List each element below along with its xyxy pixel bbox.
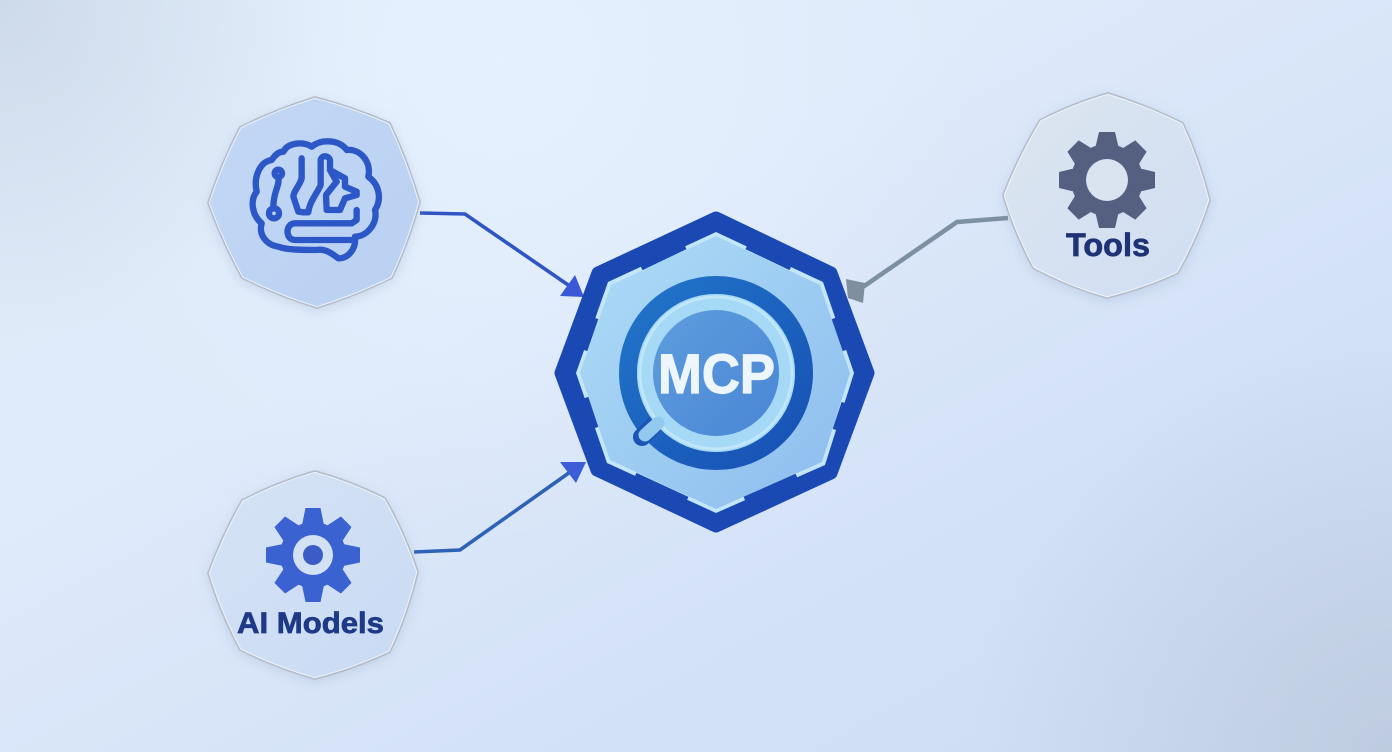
arrow: brain to MCP bbox=[420, 213, 584, 297]
icon: blue gear bbox=[266, 508, 360, 602]
node: Tools bbox=[1003, 93, 1210, 298]
label: Tools: Tools bbox=[1066, 227, 1150, 263]
hub: MCP bbox=[561, 218, 868, 526]
hub outer octagon bbox=[561, 218, 868, 526]
icon: grey gear bbox=[1059, 132, 1155, 228]
node: brain bbox=[208, 97, 420, 308]
arrow: AI Models to MCP bbox=[414, 462, 586, 552]
node: AI Models bbox=[208, 471, 418, 679]
label: AI Models: AI Models bbox=[237, 607, 384, 640]
hub inner panel bbox=[576, 232, 854, 513]
icon: brain circuit bbox=[253, 141, 379, 258]
label: MCP: MCP bbox=[658, 342, 775, 405]
magnifier ring bbox=[628, 285, 804, 461]
arrow: Tools to MCP bbox=[846, 218, 1008, 303]
